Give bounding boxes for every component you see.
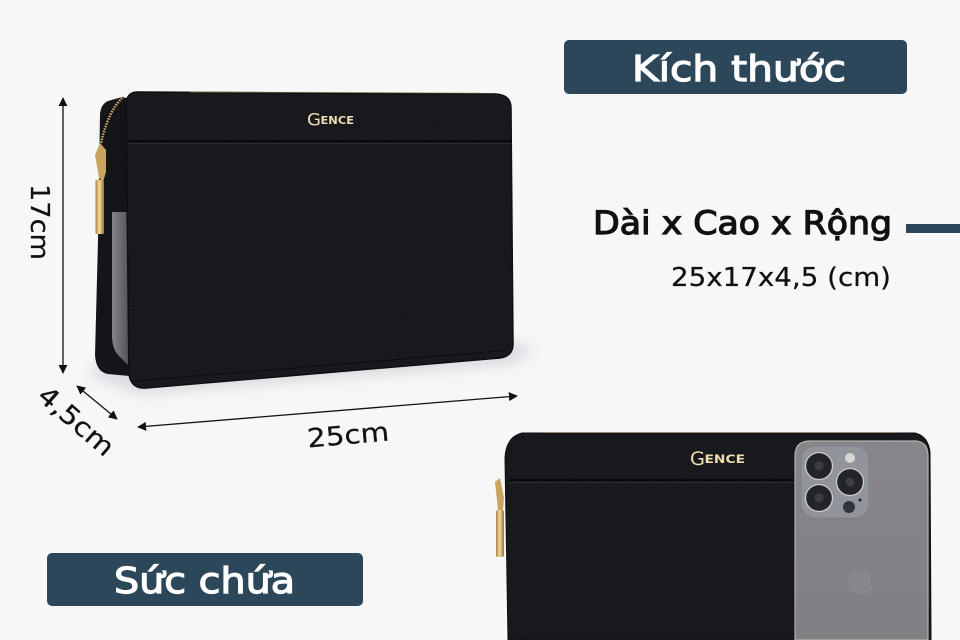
lidar xyxy=(843,501,855,513)
brand logo: G xyxy=(690,448,705,470)
arrow: depth xyxy=(77,386,117,419)
text block: dimensions xyxy=(593,204,892,293)
arrow: length xyxy=(138,396,517,427)
bag front panel xyxy=(126,92,513,388)
brand logo rest: ENCE xyxy=(704,452,745,466)
brand logo: G xyxy=(307,110,321,130)
product: bag with phone xyxy=(495,432,931,640)
label: 4,5cm: 4,5cm xyxy=(31,381,120,463)
heading: Sức chứa: Sức chứa xyxy=(114,561,295,602)
bag zipper edge xyxy=(545,432,900,434)
bag gusset xyxy=(95,97,135,376)
microphone xyxy=(858,498,862,502)
brand logo rest: ENCE xyxy=(320,115,354,127)
bag stitching xyxy=(509,480,800,482)
lens xyxy=(806,452,832,480)
lens xyxy=(806,484,832,512)
camera module xyxy=(801,446,869,518)
heading: Sức chứa xyxy=(47,553,363,606)
heading: Kích thước xyxy=(564,40,907,94)
text block: dimensions: Dài x Cao x Rộng xyxy=(593,204,892,242)
text block: dimensions: 25x17x4,5 (cm) xyxy=(671,263,891,293)
apple logo xyxy=(849,566,873,594)
product: bag front view with dimensions xyxy=(90,92,535,394)
zipper pull xyxy=(95,143,106,234)
heading: Kích thước: Kích thước xyxy=(632,49,846,90)
lens xyxy=(836,468,864,496)
label: 25cm: 25cm xyxy=(306,417,390,454)
zipper pull xyxy=(495,478,504,557)
bag shadow xyxy=(90,342,535,394)
label: 17cm: 17cm xyxy=(24,184,54,260)
phone xyxy=(795,441,928,640)
flash xyxy=(845,453,855,463)
bag body xyxy=(505,433,931,640)
bag stitching xyxy=(127,92,511,381)
arrow: height xyxy=(62,98,64,373)
accent bar xyxy=(906,224,960,233)
